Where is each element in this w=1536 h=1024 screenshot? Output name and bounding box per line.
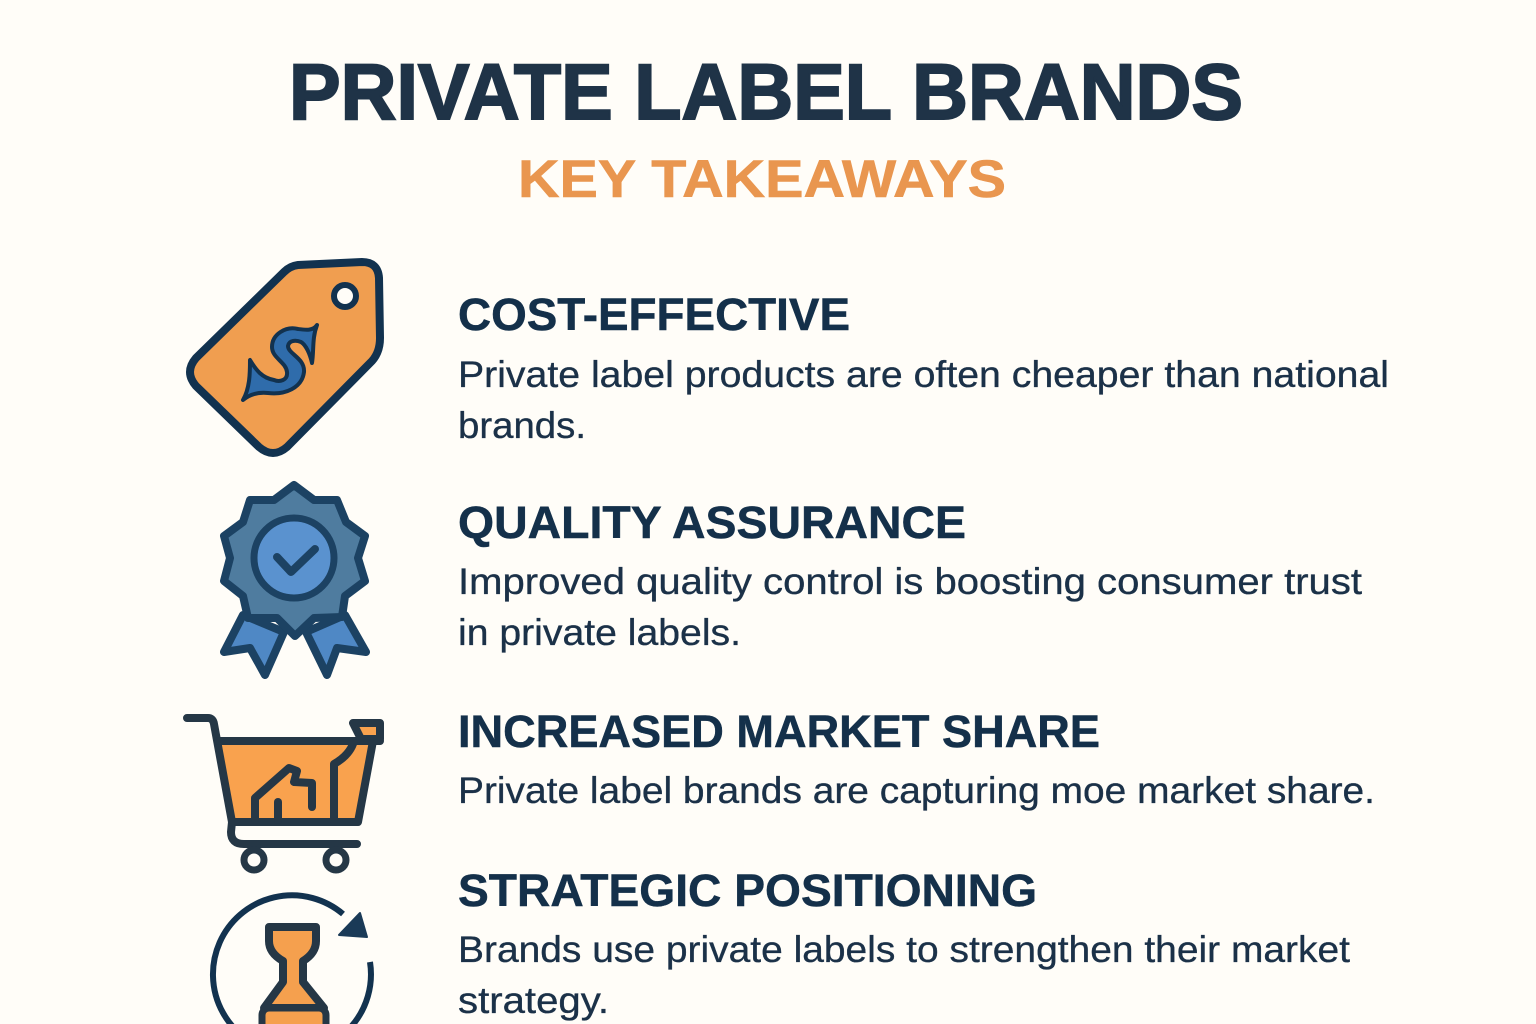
- subtitle: KEY TAKEAWAYS: [518, 150, 1006, 209]
- icon: quality rosette: [224, 485, 366, 675]
- text: strategic positioning description: strategy.: [458, 980, 609, 1021]
- text: strategic positioning description: [458, 929, 1351, 1021]
- icon: check mark: [277, 549, 315, 572]
- text: strategic positioning description: Brands use private labels to strengthen their market: [458, 929, 1351, 970]
- icon: price tag: [190, 262, 380, 453]
- text: quality assurance description: Improved quality control is boosting consumer trust: [458, 561, 1363, 602]
- text: quality assurance description: in private labels.: [458, 612, 741, 653]
- heading: quality assurance: QUALITY ASSURANCE: [458, 497, 966, 548]
- heading: increased market share: INCREASED MARKET SHARE: [458, 706, 1100, 757]
- text: cost-effective description: [458, 354, 1389, 446]
- icon: hourglass with cycle arrow: [213, 895, 371, 1024]
- text: cost-effective description: Private label products are often cheaper than national: [458, 354, 1389, 395]
- heading: strategic positioning: STRATEGIC POSITIONING: [458, 865, 1037, 916]
- text: cost-effective description: brands.: [458, 405, 586, 446]
- title: PRIVATE LABEL BRANDS: [289, 47, 1243, 136]
- text: market share description: Private label brands are capturing moe market share.: [458, 770, 1375, 811]
- text: quality assurance description: [458, 561, 1363, 653]
- icon: dollar glyph: [243, 325, 317, 400]
- heading: cost-effective: COST-EFFECTIVE: [458, 289, 850, 340]
- icon: shopping cart: [187, 718, 380, 870]
